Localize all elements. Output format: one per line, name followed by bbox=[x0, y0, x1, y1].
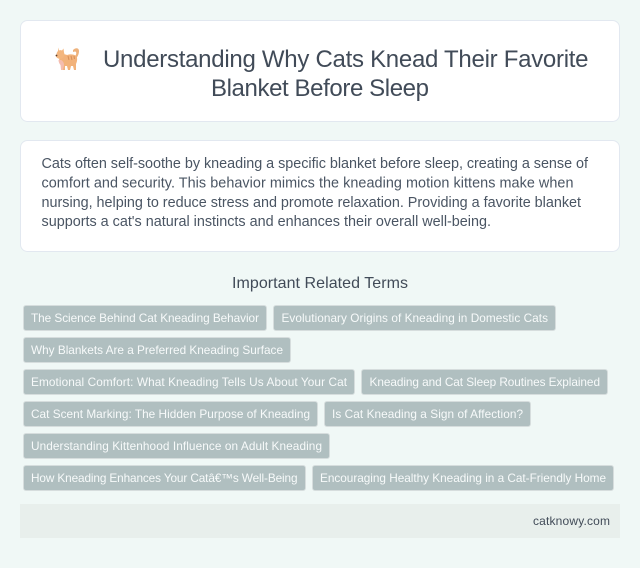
chip: science: The Science Behind Cat Kneading Behavior bbox=[31, 311, 259, 325]
chip: kittenhood: Understanding Kittenhood Influence on Adult Kneading bbox=[31, 439, 322, 453]
chip: affection bbox=[324, 402, 530, 426]
chip: sleep routines bbox=[362, 370, 608, 394]
chip: well-being: How Kneading Enhances Your Catâ€™s Well-Being bbox=[31, 471, 298, 485]
chip: science bbox=[24, 306, 266, 330]
title text: Blanket Before Sleep bbox=[211, 75, 429, 102]
description text bbox=[42, 156, 589, 230]
description text: nursing, helping to reduce stress and promote relaxation. Providing a favorite blanket bbox=[42, 195, 581, 211]
chip: scent marking bbox=[24, 402, 318, 426]
chip: evolutionary origins: Evolutionary Origins of Kneading in Domestic Cats bbox=[282, 311, 548, 325]
heading: related terms: Important Related Terms bbox=[232, 275, 408, 292]
chip: blankets: Why Blankets Are a Preferred Kneading Surface bbox=[31, 343, 283, 357]
panel: description card bbox=[20, 140, 620, 252]
chip: evolutionary origins bbox=[274, 306, 556, 330]
chip: cat-friendly home bbox=[312, 466, 614, 490]
chip: blankets bbox=[24, 338, 290, 362]
footer bbox=[20, 504, 620, 538]
chip: well-being bbox=[24, 466, 306, 490]
icon: cat bbox=[56, 48, 79, 70]
description text: Cats often self-soothe by kneading a specific blanket before sleep, creating a sense of bbox=[42, 156, 589, 172]
description text: comfort and security. This behavior mimics the kneading motion kittens make when bbox=[42, 176, 574, 192]
chip: sleep routines: Kneading and Cat Sleep Routines Explained bbox=[370, 375, 600, 389]
footer site name: catknowy.com bbox=[533, 514, 610, 528]
chip: cat-friendly home: Encouraging Healthy Kneading in a Cat-Friendly Home bbox=[320, 471, 606, 485]
title text: Understanding Why Cats Knead Their Favorite bbox=[103, 46, 588, 73]
chip: emotional comfort: Emotional Comfort: What Kneading Tells Us About Your Cat bbox=[31, 375, 348, 389]
chip: kittenhood bbox=[24, 434, 330, 458]
title text bbox=[103, 46, 588, 102]
chip: scent marking: Cat Scent Marking: The Hidden Purpose of Kneading bbox=[31, 407, 310, 421]
panel: title card bbox=[20, 20, 620, 122]
chip: affection: Is Cat Kneading a Sign of Affection? bbox=[332, 407, 523, 421]
chip: emotional comfort bbox=[24, 370, 354, 394]
panel: related term chips bbox=[24, 306, 614, 490]
description text: supports a cat's natural instincts and enhances their overall well-being. bbox=[42, 214, 491, 230]
